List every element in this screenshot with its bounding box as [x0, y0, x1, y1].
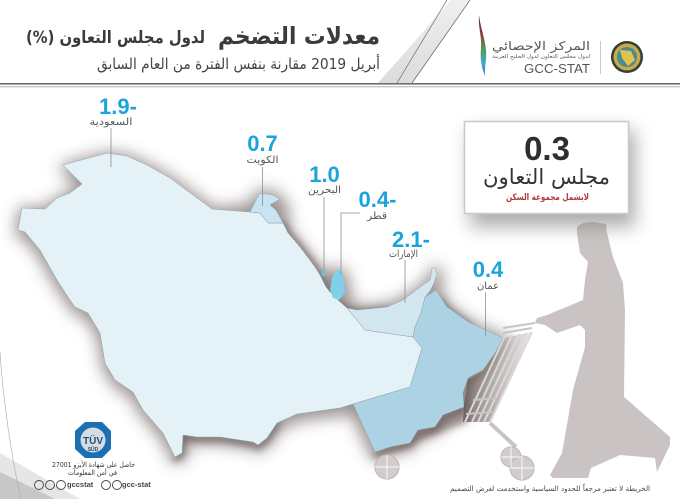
ISO certificate note: حاصل على شهادة الأيزو 27001	[52, 460, 135, 469]
social media handles: gccstat	[67, 480, 94, 489]
TUV certification badge: SÜD	[88, 446, 99, 453]
coverage note: لايشمل مجموعة السكن	[506, 193, 589, 203]
label: Oman	[473, 257, 504, 336]
logo: GCC-STAT: لدول مجلس التعاون لدول الخليج العربية	[492, 54, 591, 60]
GCC label: مجلس التعاون	[483, 165, 610, 189]
logo: GCC-STAT: المركز الإحصائي	[492, 39, 590, 54]
cart wheels	[375, 447, 534, 480]
title: لدول مجلس التعاون (%)	[26, 28, 205, 48]
GCC summary box	[464, 122, 635, 227]
social media handles	[34, 480, 151, 490]
label: Saudi Arabia	[90, 94, 137, 167]
shopper silhouette	[535, 222, 670, 478]
Bahrain	[322, 269, 325, 276]
ribbon mark	[479, 15, 486, 76]
label: UAE	[389, 227, 430, 303]
label: Qatar: 0.4-	[359, 187, 396, 212]
label: Oman: 0.4	[473, 257, 504, 282]
title	[26, 22, 380, 50]
label: Kuwait: الكويت	[246, 155, 278, 166]
label: UAE: الإمارات	[389, 249, 418, 260]
TUV certification badge: TÜV	[83, 434, 103, 447]
map disclaimer: الخريطة لا تعتبر مرجعاً للحدود السياسية واستخدمت لغرض التصميم	[450, 483, 650, 493]
ISO certificate note	[52, 460, 135, 477]
map of GCC states	[18, 153, 503, 457]
GCC emblem	[611, 41, 643, 73]
label: Bahrain	[308, 162, 341, 270]
title: معدلات التضخم	[218, 22, 380, 50]
basket	[463, 332, 532, 422]
label: Kuwait	[246, 131, 278, 206]
Saudi Arabia	[18, 153, 422, 457]
UAE	[347, 268, 437, 337]
label: Saudi Arabia: 1.9-	[99, 94, 137, 119]
label: Bahrain: 1.0	[309, 162, 340, 187]
shopping cart	[375, 323, 535, 480]
label: Bahrain: البحرين	[308, 185, 341, 196]
footer swoosh	[0, 352, 80, 499]
logo: GCC-STAT: GCC-STAT	[524, 61, 590, 76]
ISO certificate note: في أمن المعلومات	[68, 468, 117, 477]
logo: GCC-STAT	[479, 15, 643, 76]
label: Kuwait: 0.7	[247, 131, 278, 156]
Oman	[353, 290, 503, 452]
map shadow	[19, 156, 506, 460]
label: Qatar	[341, 187, 396, 275]
social media handles: gcc-stat	[122, 480, 151, 489]
label: Saudi Arabia: السعودية	[90, 117, 132, 128]
header swoosh	[378, 0, 470, 83]
label: Qatar: قطر	[366, 211, 387, 222]
Kuwait	[250, 193, 283, 223]
TUV certification badge	[75, 422, 111, 458]
label: UAE: 2.1-	[392, 227, 430, 252]
Qatar	[330, 269, 345, 300]
header rule	[0, 83, 680, 87]
GCC value: 0.3	[524, 130, 570, 167]
subtitle: أبريل 2019 مقارنة بنفس الفترة من العام السابق	[97, 54, 380, 73]
label: Oman: عمان	[477, 281, 499, 292]
